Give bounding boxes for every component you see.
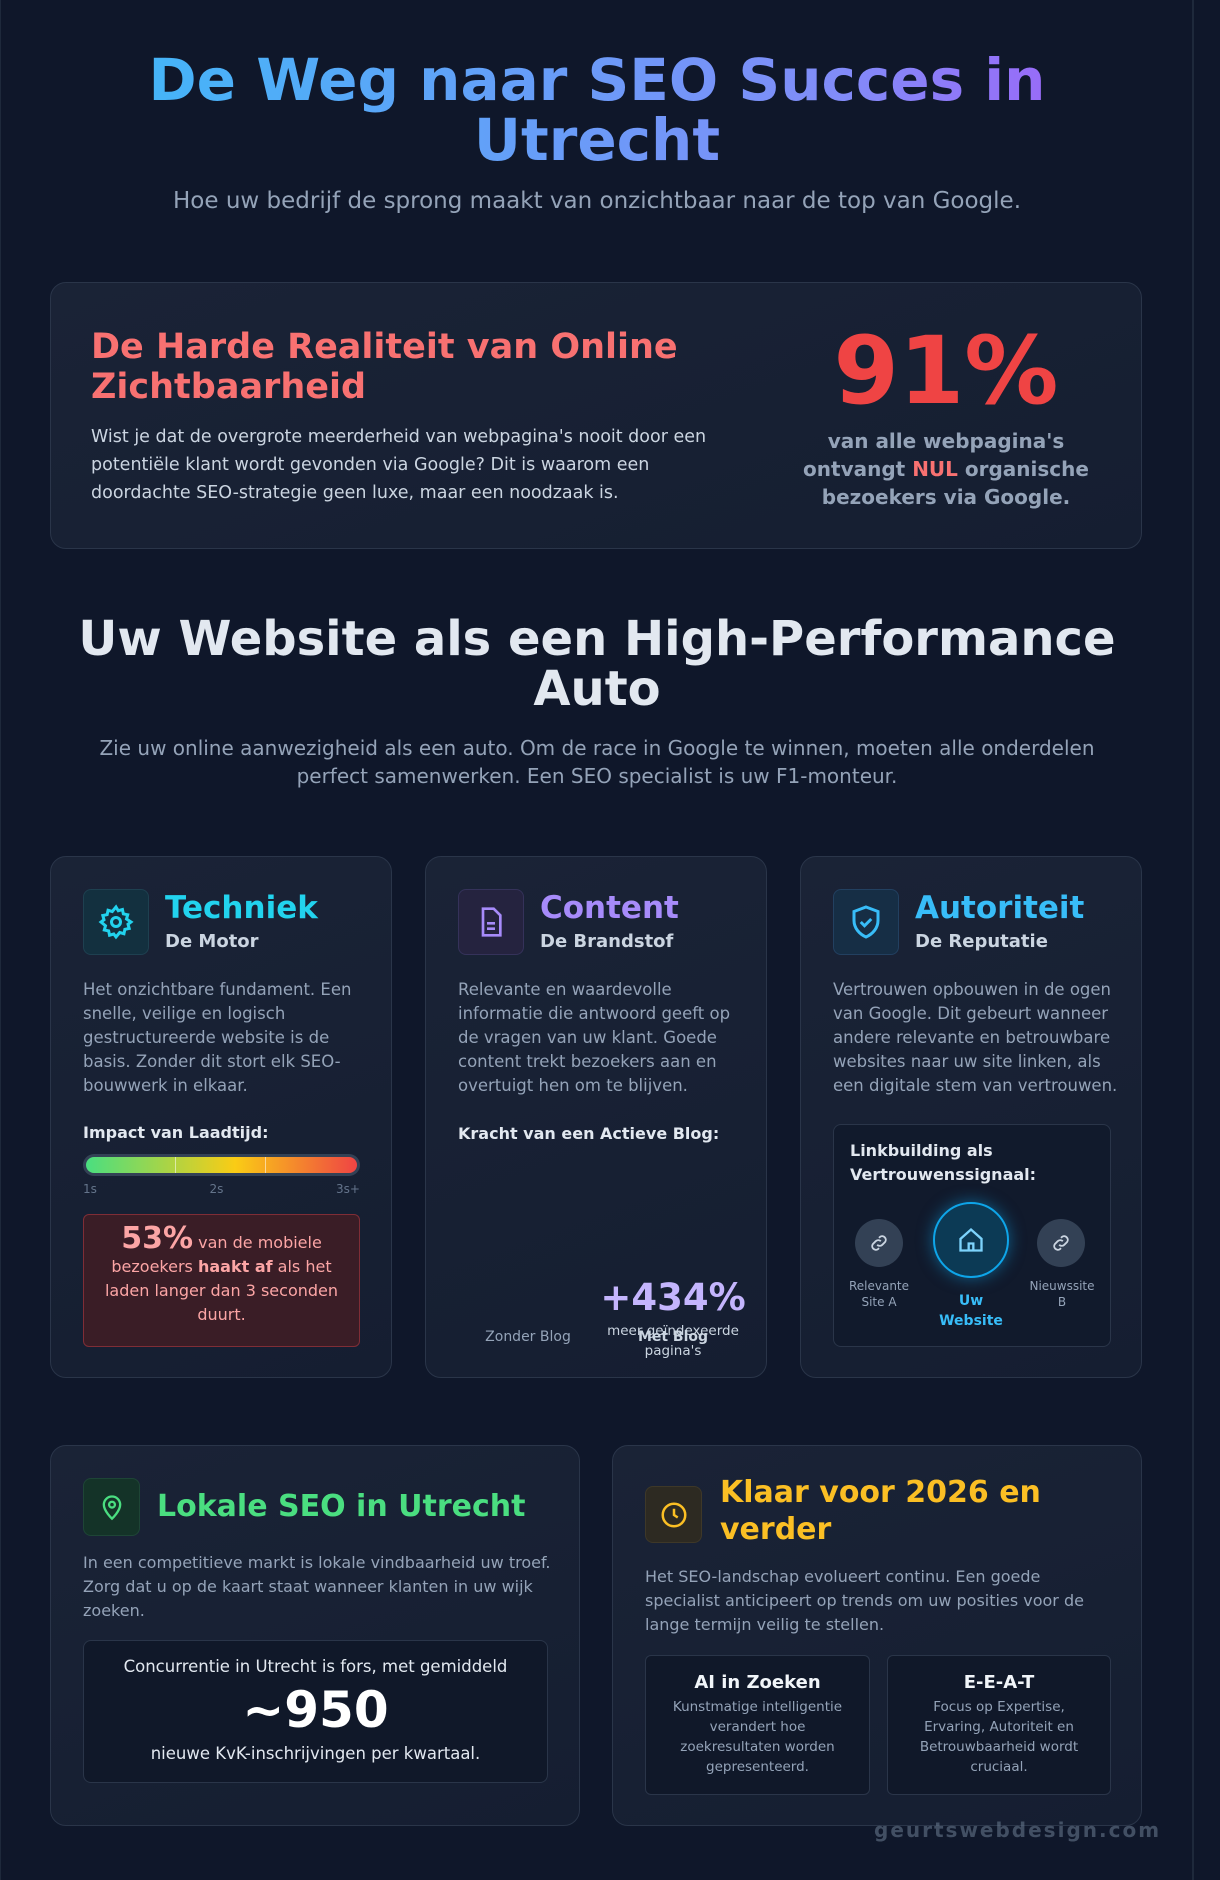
- linkbuilding diagram: Site A: [861, 1295, 897, 1309]
- icon: pin: [83, 1478, 140, 1536]
- watermark: geurtswebdesign.com: [874, 1818, 1161, 1842]
- linkbuilding diagram: Relevante: [849, 1279, 909, 1293]
- bar labels: 3s+: [336, 1182, 360, 1196]
- text block: Wist je dat de overgrote meerderheid van webpagina's nooit door een potentiële klant wordt gevonden via Google? Dit is waarom een doordachte SEO-strategie geen luxe, maar een noodzaak is.: [91, 427, 706, 503]
- icon: link A: [855, 1219, 903, 1267]
- icon: document: [458, 889, 524, 955]
- icon: gear: [83, 889, 149, 955]
- icon: link B: [1037, 1219, 1085, 1267]
- label: Kracht van een Actieve Blog:: [458, 1124, 719, 1143]
- bar: laadtijd: [83, 1154, 360, 1176]
- trend box: AI: AI in Zoeken: [694, 1672, 821, 1693]
- icon: home: [933, 1202, 1009, 1278]
- text block: Het SEO-landschap evolueert continu. Een goede specialist anticipeert op trends om uw posities voor de lange termijn veilig te stellen.: [645, 1567, 1084, 1634]
- heading: De Reputatie: [915, 931, 1048, 952]
- trend box: EEAT: Focus op Expertise, Ervaring, Autoriteit en Betrouwbaarheid wordt cruciaal.: [920, 1699, 1078, 1775]
- chart: blog: +434%: [600, 1276, 746, 1319]
- stat 91%: van alle webpagina's ontvangt NUL organische bezoekers via Google.: [803, 429, 1089, 509]
- linkbuilding diagram: Vertrouwenssignaal:: [850, 1165, 1036, 1184]
- title: Utrecht: [474, 106, 720, 174]
- section heading: Auto: [533, 661, 661, 717]
- linkbuilding diagram: Website: [939, 1313, 1003, 1329]
- stat box: ~950: [242, 1681, 389, 1739]
- label: Impact van Laadtijd:: [83, 1123, 268, 1142]
- stat box: nieuwe KvK-inschrijvingen per kwartaal.: [151, 1744, 480, 1763]
- stat box: Concurrentie in Utrecht is fors, met gemiddeld: [124, 1657, 507, 1676]
- trend box: EEAT: E-E-A-T: [964, 1672, 1034, 1693]
- heading: Content: [540, 890, 679, 926]
- callout: 53%: 53% van de mobiele bezoekers haakt af als het laden langer dan 3 seconden duurt.: [105, 1221, 338, 1324]
- heading: [720, 1475, 1041, 1547]
- panel: lokale seo: [50, 1445, 580, 1826]
- icon: shield: [833, 889, 899, 955]
- heading: [915, 890, 1084, 952]
- trend box: AI: Kunstmatige intelligentie verandert hoe zoekresultaten worden gepresenteerd.: [673, 1699, 842, 1775]
- text block: In een competitieve markt is lokale vindbaarheid uw troef. Zorg dat u op de kaart staat wanneer klanten in uw wijk zoeken.: [83, 1553, 551, 1620]
- panel: harde realiteit: [50, 282, 1142, 549]
- panel: techniek: [50, 856, 392, 1378]
- heading: De Motor: [165, 931, 259, 952]
- bar labels: 2s: [210, 1182, 223, 1196]
- bar labels: [83, 1182, 360, 1196]
- heading: Zichtbaarheid: [91, 367, 366, 407]
- title: [0, 50, 1194, 170]
- linkbuilding diagram: B: [1058, 1295, 1066, 1309]
- heading: [91, 327, 678, 407]
- section intro: Zie uw online aanwezigheid als een auto. Om de race in Google te winnen, moeten alle onderdelen perfect samenwerken. Een SEO specialist is uw F1-monteur.: [99, 736, 1095, 788]
- panel: 2026: [612, 1445, 1142, 1826]
- text block: Het onzichtbare fundament. Een snelle, veilige en logisch gestructureerde website is de basis. Zonder dit stort elk SEO-bouwwerk in elkaar.: [83, 980, 351, 1095]
- stat box: [83, 1640, 548, 1783]
- icon: clock: [645, 1486, 702, 1543]
- linkbuilding diagram: Nieuwssite: [1029, 1279, 1095, 1293]
- chart: blog: Zonder Blog: [485, 1329, 571, 1345]
- text block: Relevante en waardevolle informatie die antwoord geeft op de vragen van uw klant. Goede content trekt bezoekers aan en overtuigt hen om te blijven.: [458, 980, 730, 1095]
- heading: Klaar voor 2026 en: [720, 1475, 1041, 1510]
- chart: blog: [485, 1276, 746, 1359]
- stat 91%: 91%: [834, 317, 1058, 426]
- text block: Vertrouwen opbouwen in de ogen van Google. Dit gebeurt wanneer andere relevante en betrouwbare websites naar uw site linken, als een digitale stem van vertrouwen.: [833, 980, 1117, 1095]
- bar labels: 1s: [83, 1182, 97, 1196]
- linkbuilding diagram: Uw: [959, 1293, 983, 1309]
- heading: Autoriteit: [915, 890, 1084, 926]
- trend box: EEAT: [887, 1655, 1111, 1795]
- section heading: Uw Website als een High-Performance: [78, 611, 1116, 667]
- linkbuilding diagram: [833, 1124, 1111, 1347]
- heading: Lokale SEO in Utrecht: [157, 1489, 525, 1524]
- heading: De Brandstof: [540, 931, 673, 952]
- heading: Techniek: [165, 890, 318, 926]
- heading: [540, 890, 679, 952]
- trend box: AI: [645, 1655, 870, 1795]
- section heading: [78, 611, 1116, 717]
- heading: De Harde Realiteit van Online: [91, 327, 678, 367]
- chart: blog: Met Blog: [638, 1329, 708, 1345]
- subtitle: Hoe uw bedrijf de sprong maakt van onzichtbaar naar de top van Google.: [173, 188, 1021, 214]
- heading: verder: [720, 1512, 831, 1547]
- title: De Weg naar SEO Succes in: [149, 46, 1045, 114]
- callout: 53%: [83, 1214, 360, 1347]
- panel: autoriteit: [800, 856, 1142, 1378]
- heading: [165, 890, 318, 952]
- chart: blog: meer geïndexeerde pagina's: [607, 1323, 739, 1359]
- linkbuilding diagram: Linkbuilding als: [850, 1141, 993, 1160]
- stat 91%: [803, 317, 1089, 509]
- panel: content: [425, 856, 767, 1378]
